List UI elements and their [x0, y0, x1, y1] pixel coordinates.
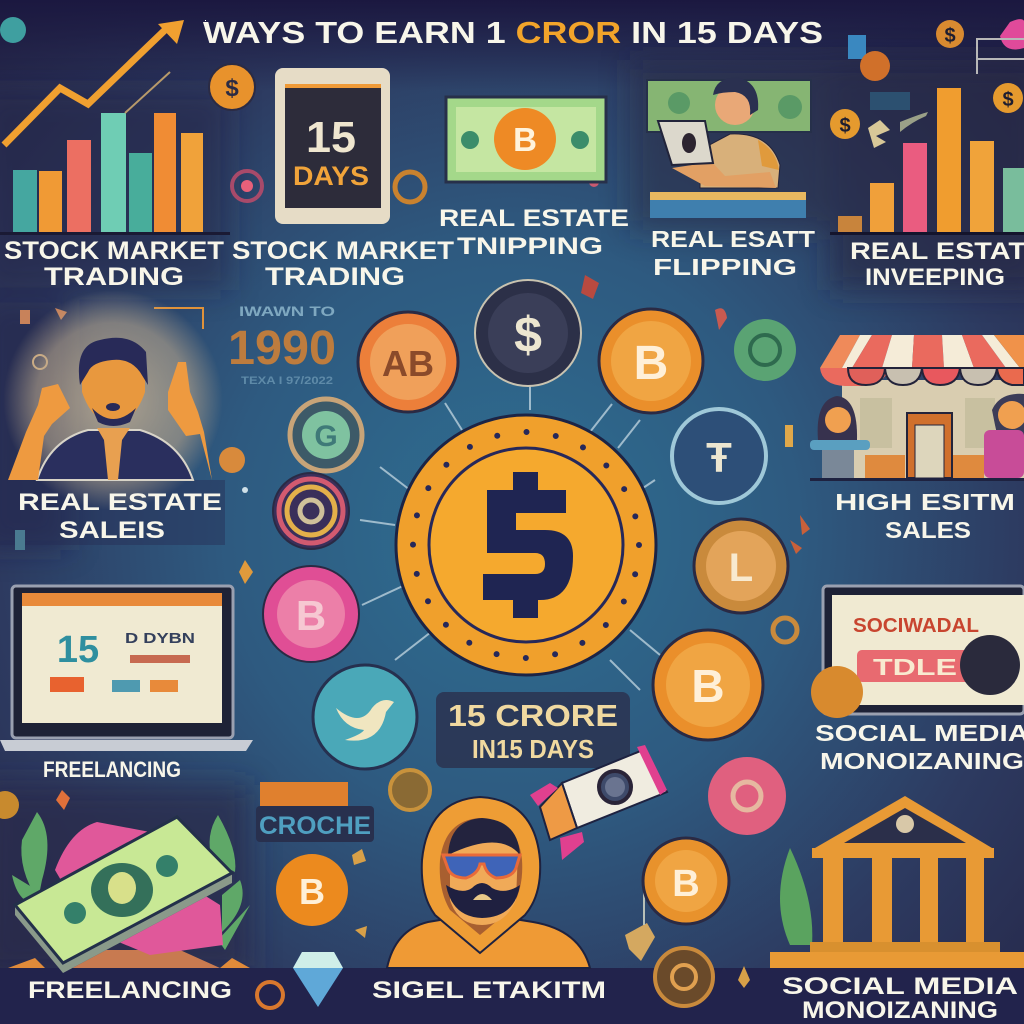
chart: right bars — [830, 20, 1024, 235]
icon: orange coin top: $ — [225, 75, 239, 102]
coin: dark bronze bottom — [655, 948, 713, 1006]
coin: teal right: Ŧ — [706, 434, 732, 481]
coin: pink: B — [296, 592, 326, 639]
person: hooded with glasses — [387, 797, 590, 968]
banknote with coin: B — [513, 121, 537, 158]
coin: pound right — [694, 519, 788, 613]
icon: money stack — [8, 812, 250, 973]
coin: teal right — [672, 409, 766, 503]
tablet: 15 days: 15 — [306, 113, 356, 162]
heading: social media monetizing: SOCIAL MEDIA — [815, 720, 1024, 746]
coin: pink lower right — [708, 757, 786, 835]
coin: bitcoin bottom left: B — [299, 871, 325, 912]
text: faded want to: IWAWN TO — [239, 303, 335, 319]
heading: freelancing lower: FREELANCING — [28, 977, 232, 1004]
title: WAYS TO EARN 1 CROR IN 15 DAYS — [203, 15, 823, 50]
heading: stock market trading 1: TRADING — [44, 263, 184, 291]
heading: social media monetizing lower: SOCIAL MEDIA — [782, 973, 1018, 1000]
laptop: social media — [811, 586, 1024, 718]
heading: real estate sales: REAL ESTATE — [18, 489, 222, 516]
heading: real estate investing: INVEEPING — [865, 264, 1005, 291]
heading: real estate flipping: REAL ESATT — [651, 226, 815, 252]
central coin network — [263, 280, 788, 769]
coin: spiral left — [273, 473, 349, 549]
coin: bird — [313, 665, 417, 769]
coin: teal left: G — [314, 420, 338, 453]
text: croche sign: CROCHE — [259, 812, 371, 840]
coin: orange left top — [358, 312, 458, 412]
coin: bitcoin bottom: B — [672, 863, 700, 905]
heading: sigel etakitm: SIGEL ETAKITM — [372, 977, 606, 1004]
laptop: social media: TDLE — [873, 654, 957, 680]
coin: pound right: L — [729, 546, 753, 590]
laptop: freelancing — [0, 586, 253, 751]
tablet: 15 days — [275, 68, 390, 224]
coin: bitcoin top right: B — [634, 337, 668, 390]
coin: bitcoin bottom — [643, 838, 729, 924]
icon: orange coin top — [209, 64, 255, 110]
tablet: 15 days: DAYS — [293, 161, 369, 191]
chart: rising bars with arrow — [0, 20, 230, 235]
coin: orange left top: AB — [382, 343, 434, 384]
heading: stock market trading 1: STOCK MARKET — [4, 237, 224, 265]
coin: bitcoin lower right: B — [691, 660, 725, 712]
heading: real estate tnipping — [439, 205, 629, 260]
coin: teal left — [290, 399, 362, 471]
heading: social media monetizing lower: MONOIZANING — [802, 997, 998, 1024]
badge: 15 crore in 15 days — [436, 692, 630, 768]
heading: social media monetizing: MONOIZANING — [820, 748, 1024, 774]
heading: real estate investing — [850, 238, 1024, 291]
chart: right bars: $ — [944, 25, 956, 47]
heading: real estate flipping: FLIPPING — [653, 254, 797, 280]
badge: 15 crore in 15 days: 15 CRORE — [448, 698, 618, 733]
text: faded want to: TEXA I 97/2022 — [241, 375, 333, 387]
heading: real estate sales: SALEIS — [59, 517, 165, 544]
heading: real estate sales — [18, 489, 222, 544]
laptop: social media: SOCIWADAL — [853, 615, 979, 637]
coin: dollar top: $ — [514, 307, 542, 363]
icon: green smile coin — [734, 319, 796, 381]
icon: target — [232, 171, 425, 202]
heading: social media monetizing — [815, 720, 1024, 774]
chart: right bars: $ — [1002, 89, 1014, 111]
text: faded want to: 1990 — [228, 322, 336, 375]
coin: pink — [263, 566, 359, 662]
main dollar coin — [396, 415, 656, 675]
heading: stock market trading 1 — [4, 237, 224, 291]
coin: bitcoin bottom left — [276, 854, 348, 926]
chart: right bars: $ — [839, 115, 851, 137]
heading: stock market trading 2: TRADING — [265, 263, 405, 291]
person with laptop on banknote — [647, 78, 811, 218]
heading: real estate tnipping: TNIPPING — [457, 233, 603, 260]
bank building — [770, 796, 1024, 968]
heading: social media monetizing lower — [782, 973, 1018, 1024]
heading: real estate flipping — [651, 226, 815, 280]
person: real estate sales — [3, 290, 223, 510]
heading: real estate tnipping: REAL ESTATE — [439, 205, 629, 232]
text: faded want to — [228, 303, 336, 387]
heading: stock market trading 2: STOCK MARKET — [232, 237, 454, 265]
laptop: freelancing: 15 — [57, 629, 99, 671]
laptop: freelancing: D DYBN — [125, 630, 195, 647]
heading: stock market trading 2 — [232, 237, 454, 291]
banknote with coin — [446, 97, 606, 182]
badge: 15 crore in 15 days: IN15 DAYS — [472, 734, 594, 764]
heading: high estim sales: HIGH ESITM — [835, 489, 1015, 515]
heading: high estim sales: SALES — [885, 517, 971, 543]
icon: rocket — [530, 745, 667, 860]
storefront — [810, 335, 1024, 481]
heading: real estate investing: REAL ESTAT — [850, 238, 1024, 265]
heading: high estim sales — [835, 489, 1015, 543]
coin: bitcoin lower right — [653, 630, 763, 740]
coin: dollar top — [475, 280, 581, 386]
text: croche sign — [256, 782, 374, 842]
heading: freelancing: FREELANCING — [43, 757, 181, 782]
icon: diamond — [293, 952, 343, 1007]
coin: bitcoin top right — [599, 309, 703, 413]
